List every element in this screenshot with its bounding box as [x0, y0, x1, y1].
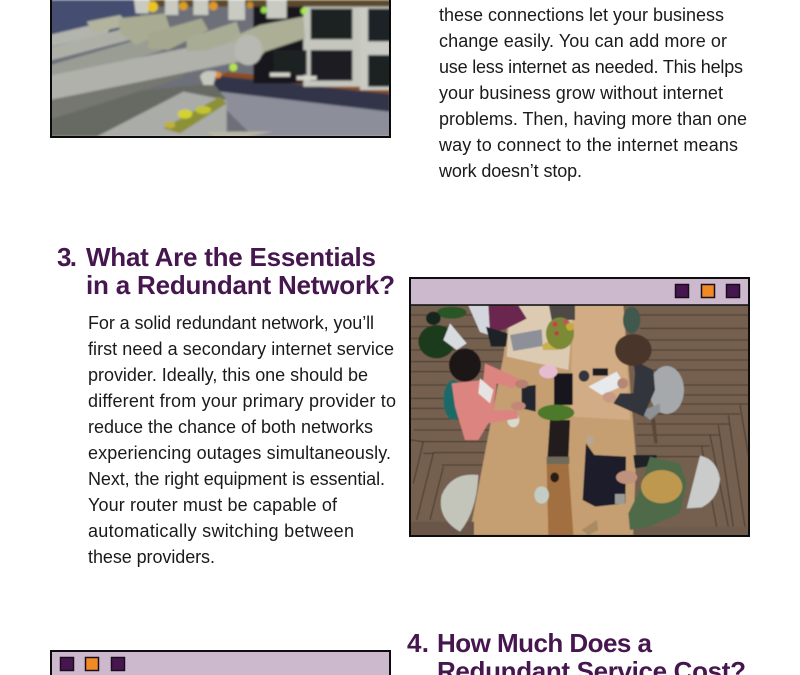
body text: section 3: first need a secondary internet service: [88, 339, 394, 359]
heading: section 3: What Are the Essentials: [86, 242, 376, 272]
window title bar: [51, 651, 390, 675]
window title bar: [410, 278, 749, 305]
body text: section 3: automatically switching between: [88, 521, 354, 541]
window control squares: [60, 658, 124, 670]
window frame with team photo: [410, 278, 750, 537]
heading: section 3: [57, 242, 395, 300]
body text: section 2 continuation: work doesn’t stop.: [438, 161, 582, 181]
heading: section 4: How Much Does a: [437, 628, 653, 658]
body text: section 3: different from your primary provider to: [88, 391, 396, 411]
photo: team working at a wooden table: [410, 302, 750, 537]
heading: section 3: 3.: [57, 242, 77, 272]
window frame: bottom left: [51, 651, 390, 675]
heading: section 4: [407, 628, 746, 675]
body text: section 2 continuation: change easily. You can add more or: [439, 31, 727, 51]
white chair bottom left: [441, 475, 478, 532]
body text: section 2 continuation: [438, 5, 747, 181]
body text: section 3: reduce the chance of both networks: [88, 417, 373, 437]
plants and flowers: [546, 317, 574, 349]
body text: section 3: Next, the right equipment is essential.: [88, 469, 385, 489]
body text: section 2 continuation: problems. Then, having more than one: [439, 109, 747, 129]
body text: section 3: experiencing outages simultaneously.: [88, 443, 391, 463]
body text: section 2 continuation: your business grow without internet: [439, 83, 723, 103]
photo: network switch with ethernet cables: [47, 0, 393, 137]
table centre items: [554, 373, 573, 405]
chair top right: [623, 307, 640, 333]
person bottom in floral: [583, 443, 626, 507]
body text: section 3: For a solid redundant network, you’ll: [88, 313, 374, 333]
body text: section 3: these providers.: [88, 547, 215, 567]
body text: section 2 continuation: way to connect to the internet means: [438, 135, 738, 155]
heading: section 4: 4.: [407, 628, 429, 658]
window control squares: [676, 284, 740, 298]
heading: section 3: in a Redundant Network?: [86, 270, 395, 300]
body text: section 3: [88, 313, 396, 567]
person right in dark top: [649, 366, 684, 414]
body text: section 2 continuation: these connections let your business: [439, 5, 724, 25]
body text: section 2 continuation: use less internet as needed. This helps: [439, 57, 743, 77]
person left in pink: [442, 380, 458, 420]
body text: section 3: provider. Ideally, this one should be: [88, 365, 368, 385]
body text: section 3: Your router must be capable of: [88, 495, 338, 515]
seated person top: [468, 305, 492, 335]
